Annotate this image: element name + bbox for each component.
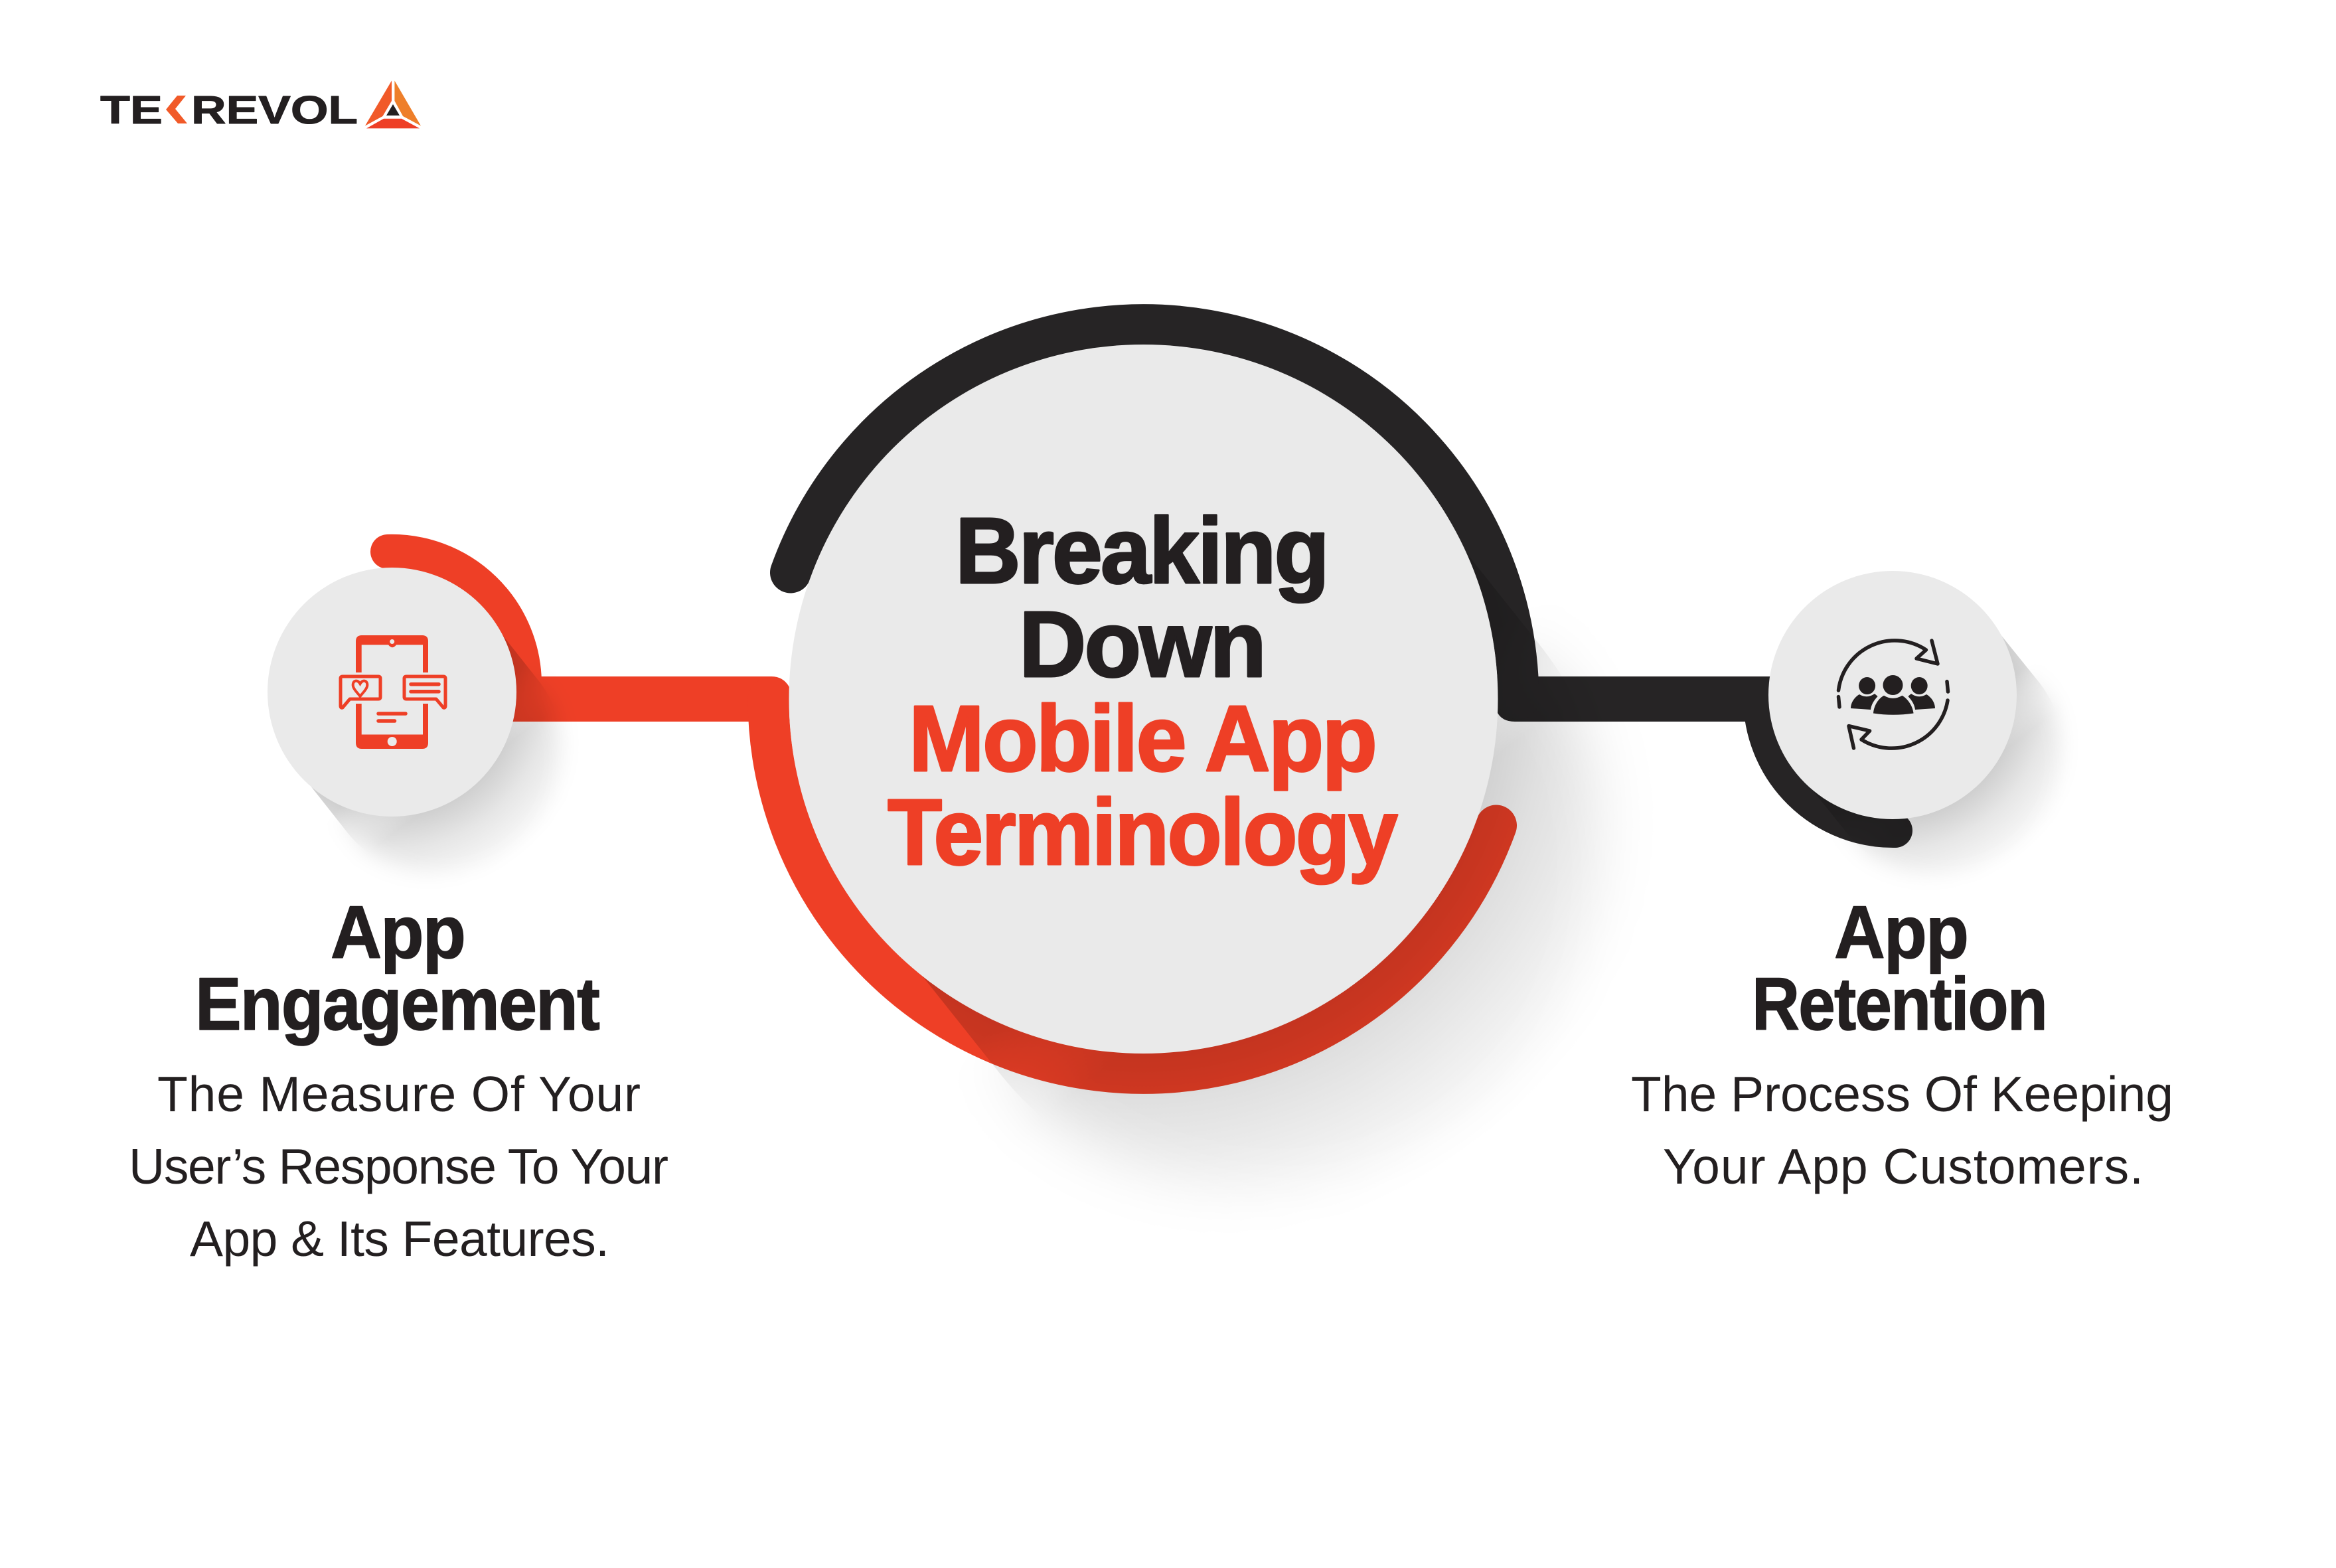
red arc under central circle — [769, 699, 1496, 1073]
engagement disc shadow — [311, 636, 562, 872]
logo wordmark: REVOL — [191, 88, 358, 132]
black connector bar — [1497, 676, 1792, 722]
title: Terminology — [888, 779, 1397, 884]
heading: App Retention — [1752, 891, 2047, 1046]
icon: customers in retention cycle — [1839, 641, 1948, 748]
text: retention description: The Process Of Keeping — [1631, 1066, 2173, 1122]
panel: app retention — [1497, 571, 2173, 1194]
heading: App Retention: Retention — [1752, 963, 2047, 1046]
retention disc — [1768, 571, 2017, 819]
heading: App Retention: App — [1834, 891, 1968, 974]
text: retention description: Your App Customers. — [1663, 1138, 2143, 1194]
text: engagement description — [129, 1066, 668, 1267]
logo wordmark — [100, 88, 358, 132]
logo triangle mark — [365, 81, 421, 128]
central circle long shadow — [923, 638, 1609, 1188]
red connector bar — [505, 676, 789, 722]
logo wordmark: TE — [100, 88, 163, 132]
heading: App Engagement — [195, 891, 599, 1046]
title: Down — [1019, 591, 1265, 696]
text: retention description — [1631, 1066, 2173, 1194]
panel: central title circle — [749, 304, 1609, 1188]
central disc — [789, 345, 1498, 1054]
icon: tablet with chat bubbles — [341, 635, 445, 749]
text: engagement description: User’s Response To Your — [129, 1138, 668, 1194]
text: engagement description: App & Its Features. — [190, 1211, 609, 1267]
engagement disc — [268, 568, 516, 817]
logo: Tekrevol — [100, 81, 421, 132]
heading: App Engagement: App — [331, 891, 465, 974]
title: Mobile App — [909, 686, 1375, 791]
heading: App Engagement: Engagement — [195, 963, 599, 1046]
panel: app engagement — [129, 552, 789, 1267]
title — [888, 498, 1397, 884]
red quarter ring around engagement disc — [388, 552, 524, 697]
retention disc shadow — [1856, 636, 2062, 874]
text: engagement description: The Measure Of Your — [157, 1066, 641, 1122]
title: Breaking — [955, 498, 1328, 603]
black arc over top of central circle — [791, 325, 1519, 699]
black quarter ring around retention disc — [1760, 698, 1895, 830]
